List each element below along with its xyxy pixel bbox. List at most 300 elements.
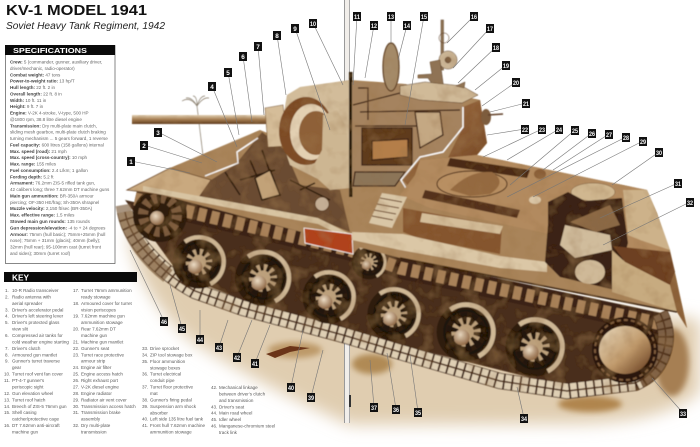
key column 3: 33. [142, 346, 148, 351]
key column 3: mat [150, 391, 158, 396]
key column 3: stowage boxes [150, 365, 181, 370]
fender lower edge [400, 258, 677, 312]
key column 1: 14. [4, 404, 10, 409]
specifications text: Main gun ammunition: BR-350A armour [10, 194, 94, 198]
callout 34: 34 [521, 416, 527, 423]
specifications text: driver/mechanic, radio-operator) [10, 66, 75, 71]
callout 19: 19 [503, 63, 509, 70]
callout 33: 33 [680, 411, 686, 418]
key column 3: Suspension arm shock [150, 404, 197, 409]
key column 2: Right exhaust port [81, 378, 119, 383]
callout 29: 29 [640, 139, 646, 146]
callout 3 [154, 128, 217, 162]
key column 3: Turret electrical [150, 372, 181, 377]
specifications text: Hull length: 22 ft. 2 in [10, 85, 55, 90]
callout 40 [287, 330, 303, 392]
turret rear bulge [403, 100, 487, 190]
key column 1: Gun elevation wheel [12, 391, 53, 396]
key column 1: 8. [5, 352, 9, 357]
key column 2: ammunition stowage [81, 320, 123, 325]
specifications text: Fuel capacity: 600 litres (158 gallons) internal [10, 142, 104, 147]
panel: key [4, 272, 275, 435]
engine deck [400, 155, 668, 252]
access hatch [571, 183, 615, 201]
key column 2: assembly [81, 417, 101, 422]
specifications text: Muzzle velocity: 2,150 ft/sec (BR-350A) [10, 206, 93, 211]
key column 1: 1. [5, 288, 9, 293]
key column 1: 11. [4, 378, 10, 383]
key column 2: Gunner's seat [81, 346, 110, 351]
callout 23 [483, 125, 546, 157]
callout 46: 46 [161, 319, 167, 326]
callout 45 [170, 285, 186, 333]
callout 44 [196, 310, 204, 344]
key column 4: Manganese-chromium steel [219, 424, 275, 429]
hull side box [403, 208, 503, 254]
title: KV-1 MODEL 1941 [6, 3, 147, 19]
callout 2 [140, 141, 202, 163]
key column 3 [142, 346, 206, 435]
fuel tank [304, 228, 353, 254]
callout 5: 5 [226, 70, 230, 77]
callout 41 [251, 325, 270, 368]
key column 3: ZIP tool stowage box [150, 352, 193, 357]
road wheel 3 [295, 263, 363, 331]
key column 1: 5. [5, 320, 9, 325]
specifications text: turning mechanism ... 5 gears forward, 1 reverse [10, 136, 108, 141]
specifications text: Fuel consumption: 2.4 L/km; 1 gallon [10, 168, 88, 173]
specifications text: sliding mesh gearbox, multi-plate clutch braking [10, 130, 106, 135]
key column 2: 32. [73, 423, 79, 428]
callout 18: 18 [493, 45, 499, 52]
key column 1: Gunner's turret traverse [12, 359, 60, 364]
subtitle: Soviet Heavy Tank Regiment, 1942 [6, 21, 165, 32]
key column 2: 24. [73, 365, 79, 370]
road wheel 1 [165, 228, 233, 296]
rear ground shadow [655, 328, 689, 396]
callout 12 [365, 21, 378, 78]
specifications text: piercing; OF-350 HE/frag; Sh-350A shrapnel [10, 200, 99, 205]
key column 1: 16. [4, 423, 10, 428]
callout 13: 13 [388, 14, 394, 21]
callout 28: 28 [623, 135, 629, 142]
road wheel 2 [227, 242, 299, 314]
callout 9: 9 [293, 26, 297, 33]
callout 4 [208, 82, 237, 147]
key column 1: 10-R Radio transceiver [12, 288, 59, 293]
callout 7 [254, 42, 264, 115]
page fold shadow [349, 72, 352, 197]
callout 21 [490, 99, 530, 112]
specifications text: 32mm (hull rear); 95-100mm cast (turret front [10, 244, 102, 250]
specifications text: nose); 75mm + 31mm (glacis); 40mm (belly); [10, 238, 100, 243]
callout 30: 30 [656, 150, 662, 157]
key column 4: track link [219, 430, 238, 435]
specifications text: Gun depression/elevation: -4 to + 24 degrees [10, 225, 106, 230]
key column 4: Mechanical linkage [219, 385, 258, 390]
specifications text: Engine: V-2K 4-stroke, V-type, 500 HP [10, 110, 89, 116]
track interior [125, 200, 665, 385]
key column 2: ready stowage [81, 294, 111, 299]
callout 25: 25 [572, 128, 578, 135]
callout 6 [239, 52, 252, 122]
key column 1: 4. [5, 314, 9, 319]
callout 22: 22 [522, 127, 528, 134]
callout 23: 23 [539, 127, 545, 134]
specifications text: Transmission: Dry multi-plate main clutch, [10, 123, 97, 128]
key column 3: 34. [142, 352, 148, 357]
key column 2: Transmission access hatch [81, 404, 136, 409]
callout 36: 36 [393, 407, 399, 414]
callout 17 [453, 24, 494, 68]
driver compartment details [225, 150, 330, 200]
callout 5 [224, 68, 239, 135]
callout 13 [387, 12, 395, 43]
callout 20 [482, 78, 520, 106]
gun barrel [132, 115, 280, 124]
drive sprocket [592, 317, 658, 383]
key column 4: 46. [211, 424, 217, 429]
key column 1: 10. [4, 372, 10, 377]
hull body [127, 80, 687, 328]
callout 34 [517, 387, 528, 423]
key column 2: Engine radiator [81, 391, 112, 396]
key column 2 [73, 288, 136, 434]
key column 1: machine gun [12, 430, 39, 434]
key column 1: 7. [5, 346, 9, 351]
callout 8: 8 [275, 33, 279, 40]
callout 32: 32 [687, 200, 693, 207]
specifications text: Stowed main gun rounds: 135 rounds [10, 219, 91, 224]
specifications text: Power-to-weight ratio: 13 hp/T [10, 79, 75, 84]
specifications text: Armament: 76.2mm ZIS-5 rifled tank gun, [10, 181, 95, 186]
key column 3: Front hull 7.62mm machine [150, 423, 206, 428]
tank illustration [123, 20, 687, 391]
key column 2: 18. [73, 301, 79, 306]
callout 3: 3 [156, 130, 160, 137]
key column 2: Dry multi-plate [81, 423, 111, 428]
key column 1: 6. [5, 333, 9, 338]
specifications text: 42 calibers long; three 7.62mm DT machine guns [10, 187, 110, 192]
key column 2: Engine air filter [81, 365, 112, 370]
key column 1: Turret roof hatch [12, 397, 46, 402]
key column 3: 36. [142, 372, 148, 377]
callout 24: 24 [556, 127, 562, 134]
key column 1: aerial spreader [12, 301, 43, 306]
engine hatch dome [437, 171, 507, 197]
key column 2: 28. [73, 391, 79, 396]
dirt patches [266, 342, 622, 412]
key column 2: 17. [73, 288, 79, 293]
deck grille [422, 190, 520, 218]
callout 4: 4 [210, 84, 214, 91]
callout 2: 2 [142, 143, 146, 150]
key column 1: Driver's clutch [12, 346, 41, 351]
key column 2: machine gun [81, 333, 108, 338]
key column 2: Machine gun mantlet [81, 339, 124, 344]
callout 39 [307, 350, 323, 402]
road wheel 5 [360, 280, 428, 348]
turret shell [280, 80, 350, 185]
key column 2: 21. [73, 339, 79, 344]
turret mantlet ring [279, 97, 333, 165]
key column 2: 20. [73, 327, 79, 332]
callout 32 [603, 198, 694, 245]
callout 17: 17 [487, 26, 493, 33]
key column 1: 12. [4, 391, 10, 396]
specifications text: Crew: 5 (commander, gunner, auxiliary driver, [10, 60, 102, 64]
upper track run [135, 199, 662, 324]
hull cut edge [205, 138, 258, 176]
callout 46 [130, 250, 168, 326]
callout 31 [600, 179, 682, 218]
engine machinery [560, 205, 620, 284]
callout 11: 11 [354, 14, 360, 21]
specifications heading: SPECIFICATIONS [13, 46, 87, 55]
road wheel 6 [428, 294, 504, 370]
key column 4 [211, 385, 275, 435]
specifications text: Armour: 75mm (hull basic); 75mm+25mm (hull [10, 232, 105, 237]
callout 19 [475, 61, 510, 90]
callout 16 [447, 12, 478, 43]
specifications text [10, 60, 110, 256]
key column 2: 23. [73, 352, 79, 357]
key column 2: Transmission brake [81, 410, 121, 415]
callout 31: 31 [675, 181, 681, 188]
key column 3: Drive sprocket [150, 346, 180, 351]
rear deck plate [623, 190, 670, 250]
callout 37 [370, 360, 378, 412]
key column 3: ammunition stowage [150, 430, 192, 435]
key column 2: Armoured cover for turret [81, 301, 133, 306]
front idler wheel [133, 188, 187, 242]
callout 44: 44 [197, 337, 203, 344]
key column 1: Driver's left steering lever [12, 314, 64, 319]
ground shadow [128, 232, 700, 425]
callout 16: 16 [471, 14, 477, 21]
driver compartment [197, 132, 350, 232]
floor stowage ladder [369, 193, 407, 228]
callout 21: 21 [523, 101, 529, 108]
callout 1: 1 [129, 159, 133, 166]
callout 14: 14 [404, 23, 410, 30]
turret hatch [383, 43, 399, 91]
road wheel 7 [497, 309, 573, 385]
specifications text: Overall length: 22 ft. 8 in [10, 91, 62, 96]
key column 2: Turret race protective [81, 352, 125, 357]
key column 2: armour strip [81, 359, 106, 364]
hull side light band [352, 232, 547, 272]
specifications text: and sides); 30mm (turret roof) [10, 251, 71, 256]
key column 1: 2. [5, 294, 9, 299]
turret interior [352, 82, 463, 188]
key column 4: 44. [211, 411, 217, 416]
callout 15: 15 [421, 14, 427, 21]
key column 1: Driver's accelerator pedal [12, 307, 63, 312]
callout 7: 7 [256, 44, 260, 51]
key column 1: Breech of ZIS-5 76mm gun [12, 404, 67, 409]
key column 1: catcher/protective cage [12, 417, 59, 422]
key column 1: Compressed air tanks for [12, 333, 63, 338]
key column 1: view slit [12, 327, 29, 332]
turret interior machinery [353, 88, 460, 186]
key column 2: transmission [81, 430, 107, 434]
key column 1: periscopic sight [12, 384, 44, 390]
front hatch plate [127, 168, 211, 200]
callout 10: 10 [310, 21, 316, 28]
turret mantlet disc [299, 111, 333, 155]
specifications text: Max. speed (cross-country): 10 mph [10, 155, 88, 160]
key column 2: 26. [73, 378, 79, 383]
callout 27: 27 [606, 132, 612, 139]
key column 1: Turret roof vent fan cover [12, 372, 63, 377]
key column 2: Rear 7.62mm DT [81, 327, 116, 332]
key column 1: DT 7.62mm anti-aircraft [12, 423, 60, 428]
antenna [182, 96, 209, 172]
key column 2: 29. [73, 397, 79, 402]
key column 1: Driver's protected glass [12, 320, 60, 325]
callout 25 [510, 126, 579, 185]
callout 24 [507, 125, 563, 160]
key column 2: 30. [73, 404, 79, 409]
lower track run [123, 205, 666, 391]
callout 28 [507, 133, 630, 197]
page gutter [344, 0, 351, 423]
key column 2: Engine access hatch [81, 372, 123, 377]
key column 2: vision periscopes [81, 307, 117, 312]
callout 14 [398, 21, 411, 60]
callout 36 [387, 353, 400, 414]
key column 1: Armoured gun mantlet [12, 352, 58, 357]
key column 3: Floor ammunition [150, 359, 186, 364]
key column 3: 41. [142, 423, 148, 428]
key column 2: Radiator air vent cover [81, 397, 127, 402]
key column 2: V-2K diesel engine [81, 384, 119, 390]
key column 1: Shell casing [12, 410, 37, 415]
engine bay opening [545, 192, 628, 290]
rear machine gun [481, 109, 503, 125]
callout 11 [353, 12, 361, 85]
callout 8 [273, 31, 286, 95]
specifications text: Combat weight: 47 tons [10, 72, 61, 77]
callout 27 [553, 130, 613, 170]
callout 15 [405, 12, 428, 125]
callout 35: 35 [415, 410, 421, 417]
key column 1 [4, 288, 69, 434]
key column 2: Turret 76mm ammunition [81, 288, 132, 293]
key column 4: between driver's clutch [219, 391, 266, 396]
key column 4: 42. [211, 385, 217, 390]
callout 22 [487, 125, 529, 135]
key column 1: gear [12, 365, 22, 370]
key column 2: 19. [73, 314, 79, 319]
key column 2: 25. [73, 372, 79, 377]
specifications text: Max. effective range: 1.5 miles [10, 213, 75, 218]
gun mount [265, 105, 288, 147]
air tank [315, 197, 329, 211]
key column 2: 22. [73, 346, 79, 351]
specifications text: Fording depth: 5.2 ft [10, 174, 54, 179]
callout 26: 26 [589, 131, 595, 138]
callout 43: 43 [216, 345, 222, 352]
panel: specifications [5, 45, 115, 264]
key column 4: and transmission [219, 398, 254, 403]
callout 20: 20 [513, 80, 519, 87]
key column 1: Radio antenna with [12, 294, 51, 299]
callout 10 [309, 19, 343, 85]
callout 33 [652, 378, 687, 418]
turret cut edge [401, 107, 463, 190]
key column 1: PT-4-7 gunner's [12, 378, 45, 383]
callout 40: 40 [288, 385, 294, 392]
callout 45: 45 [179, 326, 185, 333]
deck louvres [447, 158, 530, 178]
fender strip [143, 186, 350, 240]
callout 41: 41 [252, 361, 258, 368]
key column 3: Turret floor protective [150, 385, 194, 390]
key column 3: conduit pipe [150, 378, 175, 383]
key column 3: 39. [142, 404, 148, 409]
callout 18 [458, 43, 500, 83]
key column 4: Main road wheel [219, 411, 252, 416]
callout 12: 12 [371, 23, 377, 30]
specifications text: Max. speed (road): 21 mph [10, 149, 67, 154]
key column 3: 37. [142, 385, 148, 390]
callout 1 [127, 157, 190, 173]
key column 3: 40. [142, 417, 148, 422]
turret side plate [310, 110, 350, 190]
key column 3: absorber [150, 410, 168, 415]
specifications text: @1800 rpm, 38.8 litre diesel engine [10, 117, 82, 122]
key heading: KEY [12, 274, 30, 282]
callout 39: 39 [308, 395, 314, 402]
callout 6: 6 [241, 54, 245, 61]
turret mantlet face [290, 104, 332, 160]
specifications text: Height: 9 ft. 7 in [10, 104, 44, 109]
road wheel 4 [347, 240, 391, 284]
key column 3: Gunner's firing pedal [150, 397, 192, 402]
callout 43 [215, 320, 228, 352]
callout 29 [533, 137, 647, 197]
key column 1: 15. [4, 410, 10, 415]
key column 1: 9. [5, 359, 9, 364]
exhaust ports [529, 169, 546, 204]
callout 30 [612, 148, 663, 185]
callout numbers [127, 12, 694, 423]
key column 2: 27. [73, 384, 79, 390]
key column 3: 38. [142, 397, 148, 402]
key column 2: 31. [73, 410, 79, 415]
callout 35 [410, 355, 422, 417]
callout 42 [233, 320, 252, 362]
key column 1: 3. [5, 307, 9, 312]
specifications text: Width: 10 ft. 11 in [10, 98, 47, 103]
callout 42: 42 [234, 355, 240, 362]
key column 4: 45. [211, 417, 217, 422]
key column 4: Idler wheel [219, 417, 241, 422]
key column 1: 13. [4, 397, 10, 402]
key column 4: 43. [211, 404, 217, 409]
anti-aircraft machine gun [400, 20, 478, 103]
rear fender [612, 246, 687, 328]
key column 2: 7.62mm machine gun [81, 314, 125, 319]
key column 3: 35. [142, 359, 148, 364]
callout 9 [291, 24, 330, 130]
callout 26 [543, 129, 596, 170]
specifications text: Max. range: 155 miles [10, 162, 57, 167]
key column 3: Left side 135 litre fuel tank [150, 417, 204, 422]
key column 4: Driver's seat [219, 404, 245, 409]
